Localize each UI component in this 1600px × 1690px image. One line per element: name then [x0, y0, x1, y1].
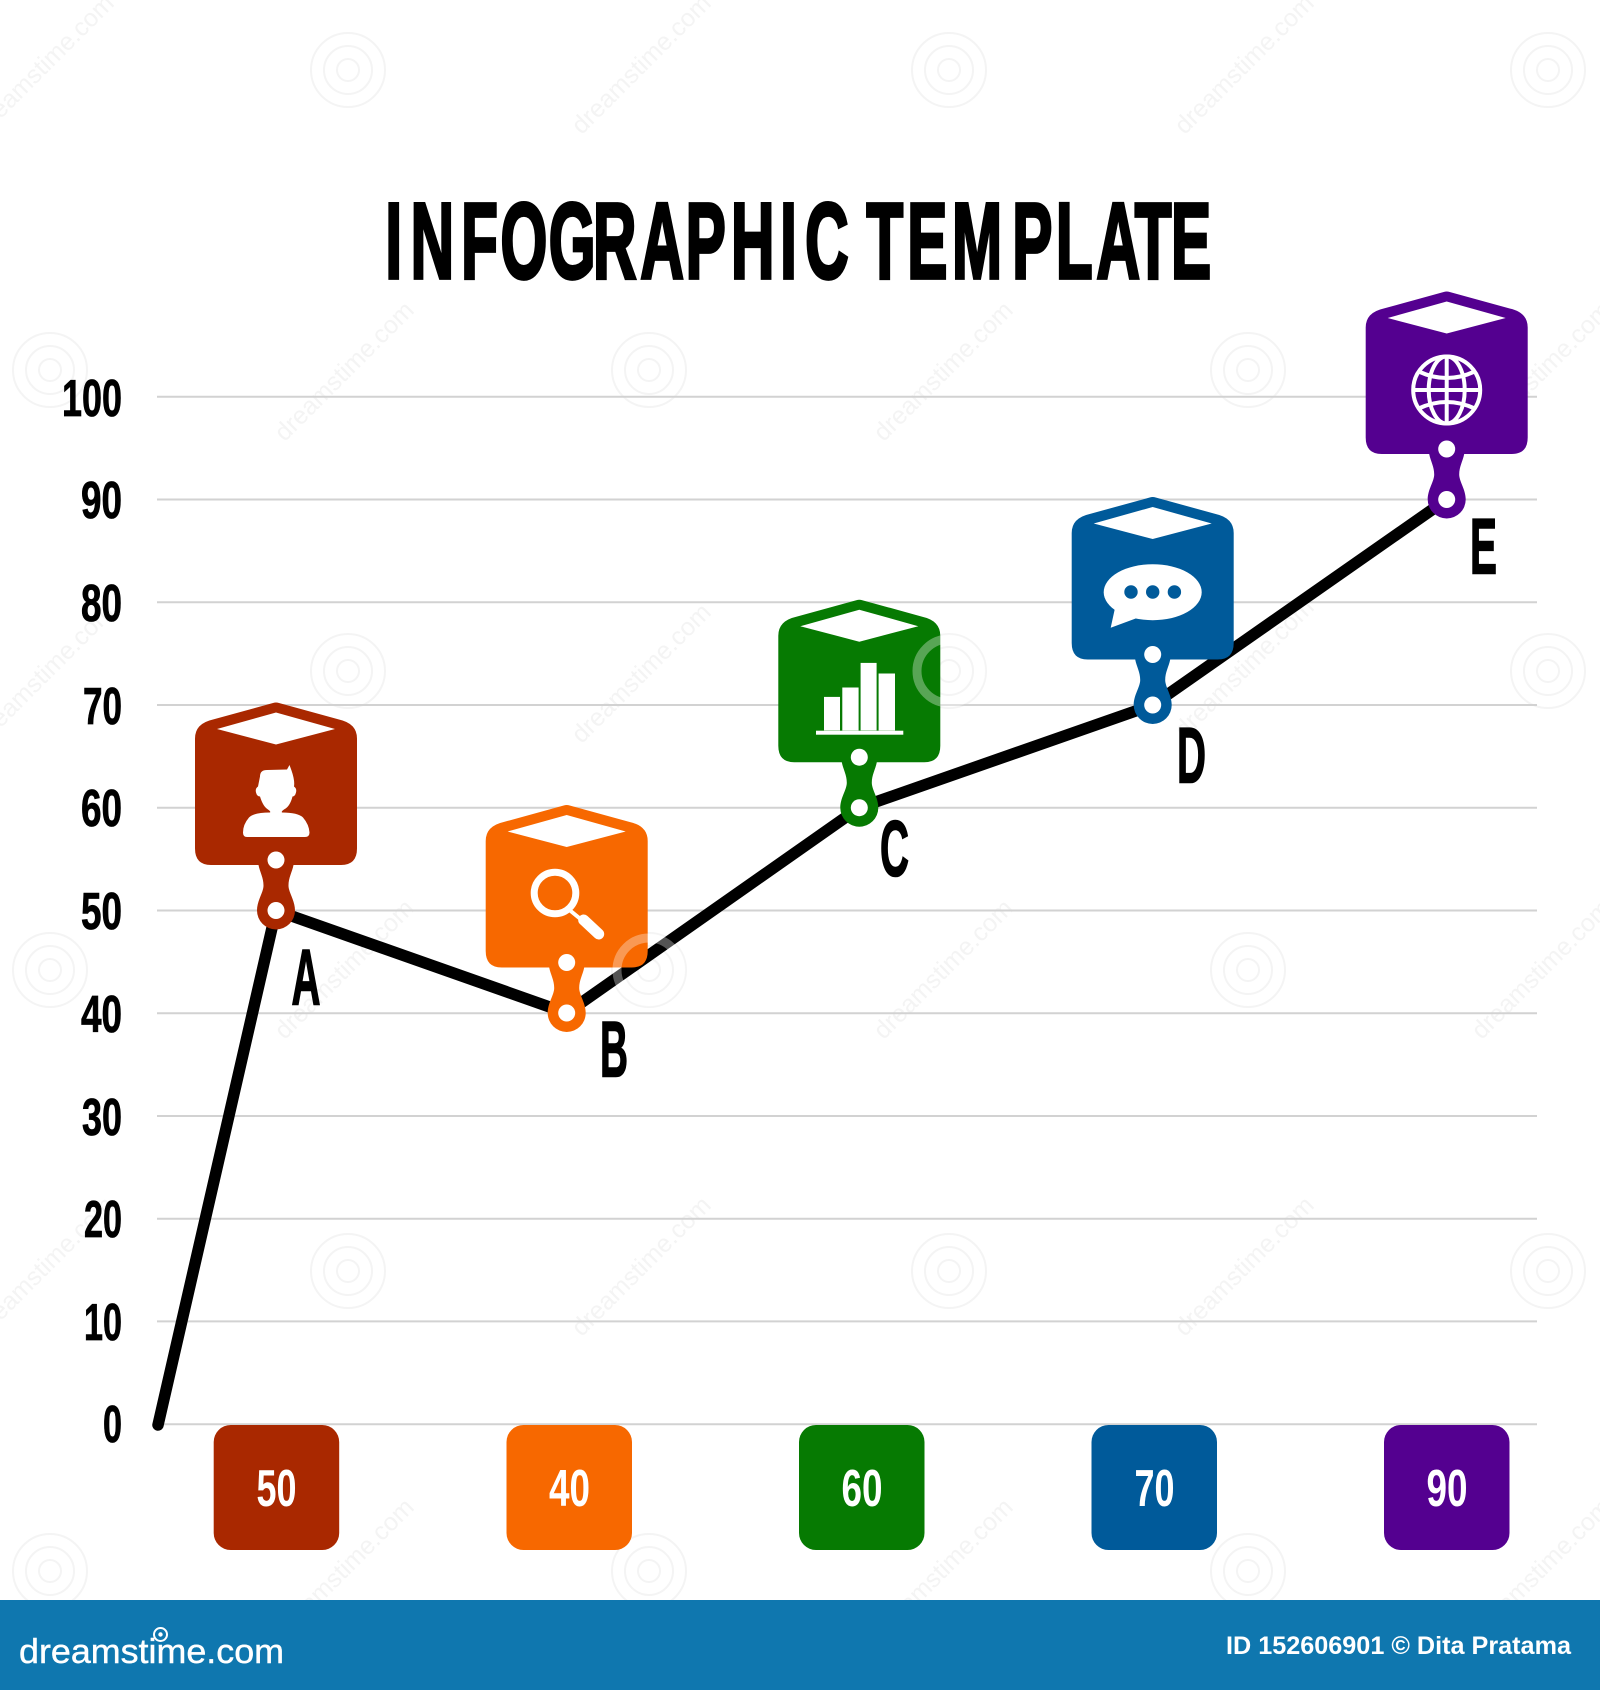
y axis labels — [62, 370, 122, 1454]
y axis labels: 20 — [84, 1191, 122, 1249]
line chart path — [158, 500, 1447, 1425]
icon: magnifying glass — [534, 872, 599, 934]
value tile 50: 50 — [256, 1460, 296, 1518]
icon: person — [243, 765, 310, 837]
pin A: person icon — [195, 702, 357, 930]
value tile 70 — [1092, 1425, 1217, 1550]
value tile 90: 90 — [1426, 1460, 1468, 1518]
infographic canvas: B — [600, 1004, 628, 1094]
pin E: globe icon — [1366, 292, 1528, 518]
y axis labels: 40 — [81, 986, 122, 1044]
watermark text: dreamstime.com — [1169, 593, 1320, 744]
value tile 60 — [799, 1425, 924, 1550]
icon: bar chart — [816, 663, 903, 735]
y axis labels: 0 — [103, 1396, 122, 1454]
watermark text: dreamstime.com — [868, 894, 1019, 1045]
watermark text: dreamstime.com — [566, 598, 717, 749]
value tile 60: 60 — [842, 1460, 882, 1518]
watermark text: dreamstime.com — [269, 296, 420, 447]
y axis labels: 70 — [83, 678, 122, 736]
value tile 40 — [506, 1425, 632, 1550]
watermark text: dreamstime.com — [566, 1191, 717, 1342]
watermark text: dreamstime.com — [269, 1493, 420, 1644]
y axis labels: 90 — [81, 472, 122, 530]
footer logo: dreamstime.com — [19, 1633, 284, 1671]
y axis labels: 100 — [62, 370, 122, 428]
value tile 40: 40 — [549, 1460, 590, 1518]
y axis labels: 60 — [81, 780, 122, 838]
point label E: E — [1470, 502, 1497, 590]
watermark text: dreamstime.com — [269, 894, 420, 1045]
y axis labels: 10 — [84, 1294, 122, 1352]
pin C: bar chart icon — [778, 600, 940, 827]
y axis labels: 50 — [81, 883, 122, 941]
pin D: speech bubble icon — [1072, 497, 1234, 724]
y axis labels: 80 — [81, 575, 122, 633]
value tile 70: 70 — [1134, 1460, 1174, 1518]
watermark text: dreamstime.com — [868, 296, 1019, 447]
icon: speech bubble — [1104, 564, 1202, 628]
point label A: A — [292, 932, 320, 1022]
point label D: D — [1177, 710, 1206, 800]
pin B: magnifier icon — [486, 805, 648, 1032]
watermark text: dreamstime.com — [1169, 1191, 1320, 1342]
title: INFOGRAPHIC TEMPLATE — [385, 182, 1211, 301]
point label C: C — [880, 804, 909, 892]
value tile 50 — [214, 1425, 339, 1550]
watermark text: dreamstime.com — [868, 1493, 1019, 1644]
footer credit: ID 152606901 © Dita Pratama — [1226, 1632, 1572, 1660]
footer bar — [0, 1600, 1600, 1690]
icon: globe — [1413, 356, 1480, 424]
y axis labels: 30 — [82, 1089, 122, 1147]
value tile 90 — [1384, 1425, 1510, 1550]
